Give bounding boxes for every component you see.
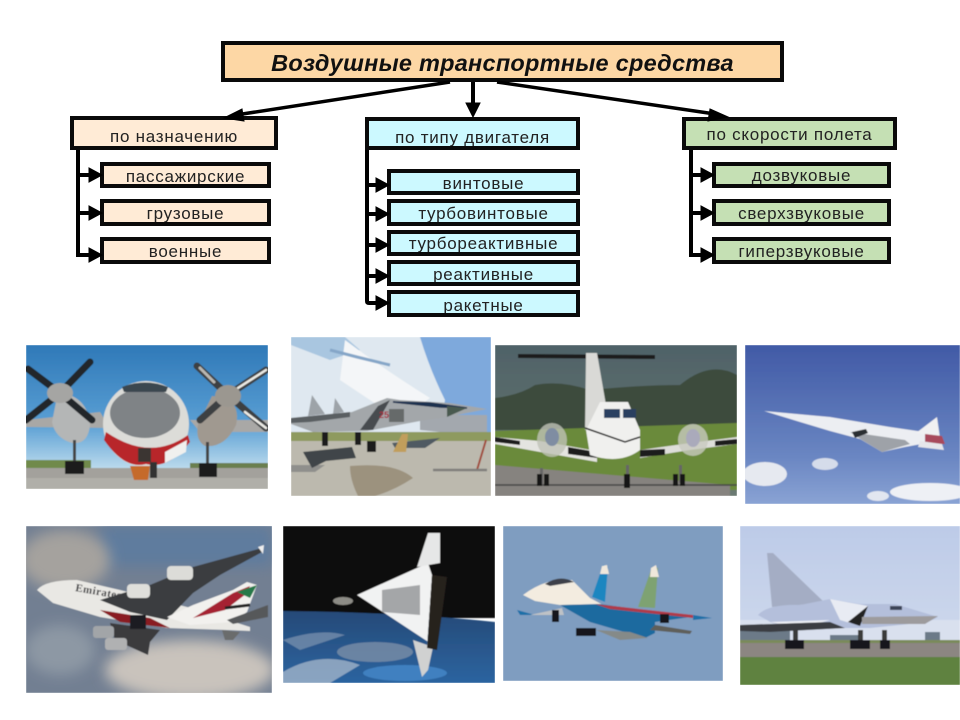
- item: passenger: [100, 162, 271, 188]
- connector arrows: [76, 80, 730, 311]
- item: propeller: винтовые: [443, 174, 524, 193]
- photo: wide-body airliner climbing: Emirates: [74, 582, 123, 602]
- item: cargo: [100, 199, 271, 226]
- panel: engine type heading: по типу двигателя: [395, 128, 550, 147]
- item: rocket: ракетные: [443, 296, 524, 315]
- item: military: [100, 237, 271, 264]
- item: hypersonic: гиперзвуковые: [738, 242, 865, 261]
- panel: engine type heading: [365, 117, 580, 150]
- photo: fighter jet in display livery: [503, 526, 723, 681]
- panel: purpose heading: [70, 116, 278, 150]
- title: Воздушные транспортные средства: [271, 50, 734, 76]
- photo: fighter jet on the apron: 25: [379, 410, 389, 420]
- item: turbojet: [387, 230, 580, 256]
- item: hypersonic: [712, 237, 891, 264]
- item: propeller: [387, 169, 580, 195]
- aircraft photos: [26, 337, 960, 693]
- item: turboprop: турбовинтовые: [418, 204, 549, 223]
- item: jet: реактивные: [433, 265, 534, 284]
- panel: purpose heading: по назначению: [110, 127, 238, 146]
- item: supersonic: сверхзвуковые: [738, 204, 865, 223]
- photo: front view of a turboprop transport: [26, 345, 268, 489]
- item: turbojet: турбореактивные: [409, 234, 558, 253]
- photo: fighter jet on the apron: [291, 337, 491, 496]
- title: [221, 41, 784, 82]
- item: jet: [387, 260, 580, 286]
- item: subsonic: дозвуковые: [752, 166, 851, 185]
- item: passenger: пассажирские: [126, 167, 245, 186]
- item: military: военные: [149, 242, 222, 261]
- item: cargo: грузовые: [147, 204, 224, 223]
- photo: supersonic airliner in flight: [743, 345, 960, 504]
- photo: swing-wing bomber on a runway: [740, 526, 960, 685]
- photo: wide-body airliner climbing: [20, 526, 275, 700]
- photo: spaceplane above the Earth: [283, 526, 495, 683]
- item: supersonic: [712, 199, 891, 226]
- item: rocket: [387, 290, 580, 317]
- panel: speed heading: по скорости полета: [706, 125, 873, 144]
- photo: twin-prop business aircraft on a runway: [495, 345, 737, 496]
- item: turboprop: [387, 199, 580, 226]
- panel: speed heading: [682, 117, 897, 150]
- item: subsonic: [712, 162, 891, 188]
